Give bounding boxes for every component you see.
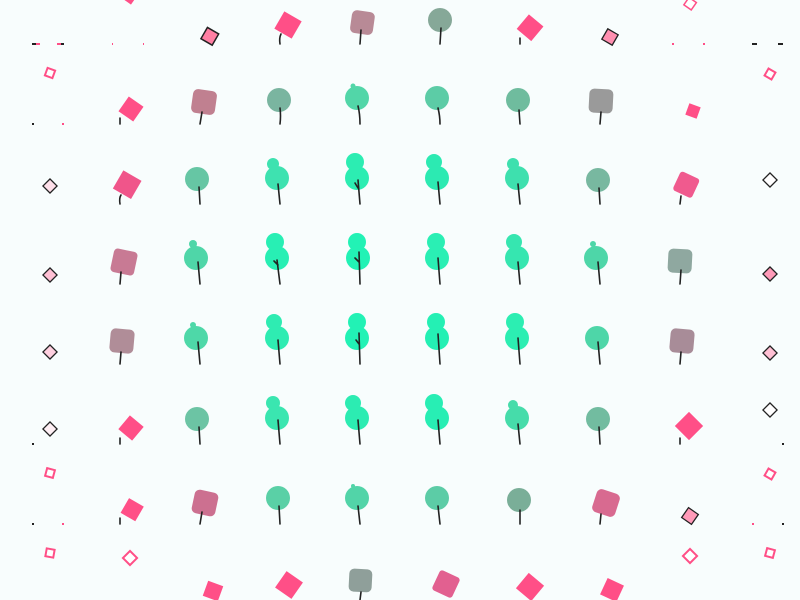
row 5 bbox=[32, 394, 784, 445]
row 3 bbox=[43, 233, 777, 284]
row 2 bbox=[43, 153, 777, 204]
row 6 bbox=[32, 468, 784, 525]
row 4 bbox=[43, 313, 777, 364]
row 0 bbox=[32, 0, 783, 45]
row 7 bbox=[45, 548, 775, 600]
row 1 bbox=[32, 68, 775, 125]
